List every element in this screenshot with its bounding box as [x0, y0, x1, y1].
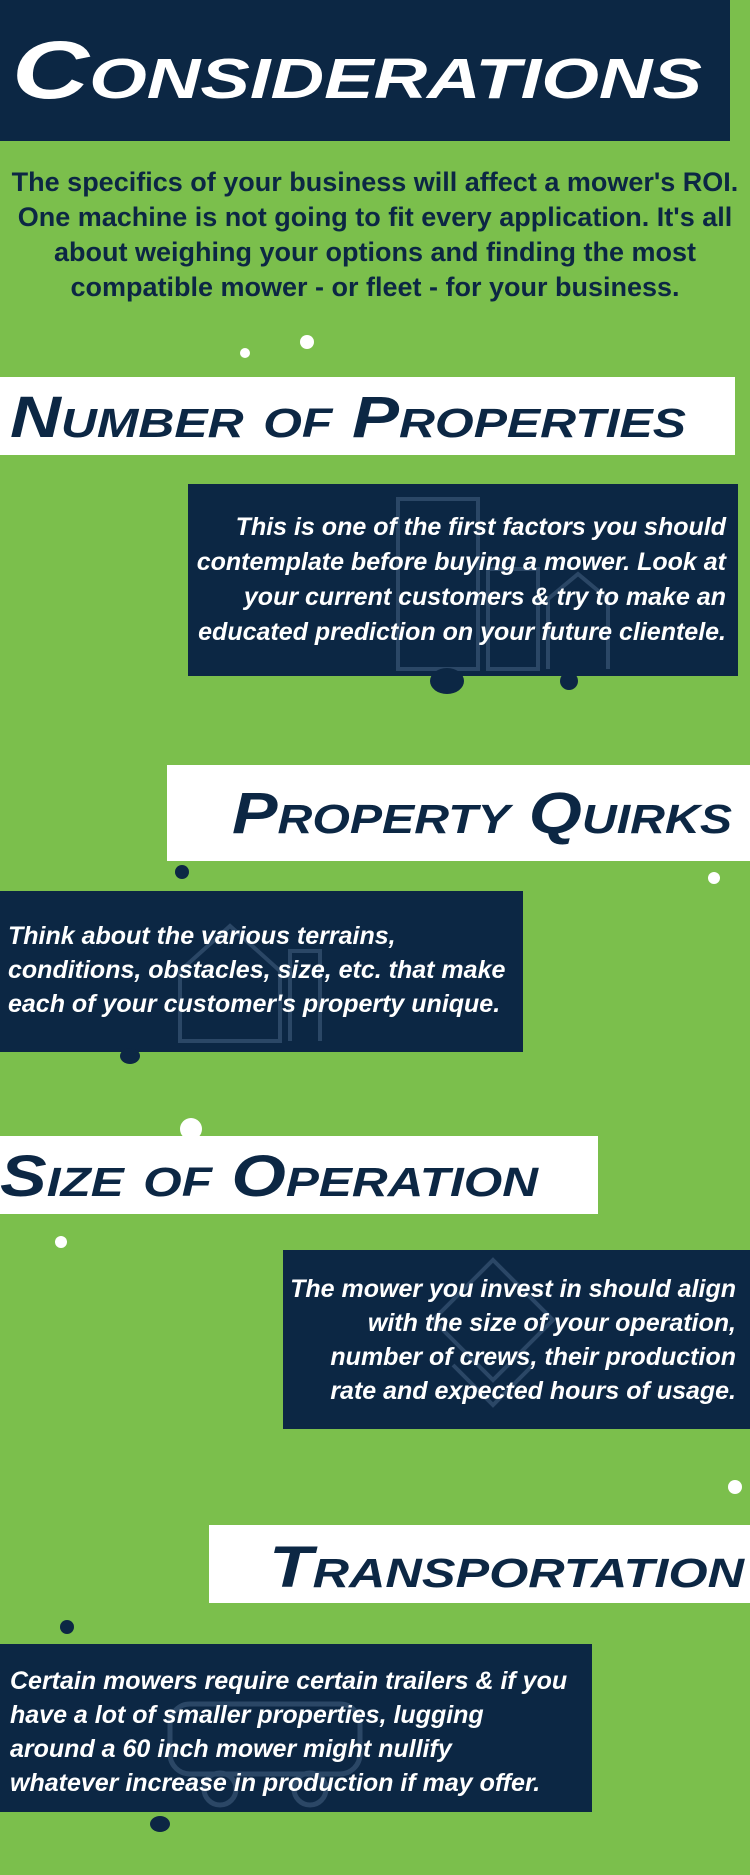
- text: number of crews, their production: [330, 1343, 736, 1371]
- text: whatever increase in production if may offer.: [10, 1769, 540, 1797]
- text: conditions, obstacles, size, etc. that make: [8, 956, 505, 984]
- intro text: about weighing your options and finding the most: [54, 237, 696, 267]
- title banner: [0, 0, 730, 141]
- icon: buildings: [396, 497, 610, 671]
- text: each of your customer's property unique.: [8, 990, 500, 1018]
- text: The mower you invest in should align: [290, 1275, 736, 1303]
- intro text: One machine is not going to fit every application. It's all: [18, 202, 732, 232]
- text: Certain mowers require certain trailers & if you: [10, 1667, 567, 1695]
- intro text: The specifics of your business will affect a mower's ROI.: [12, 167, 738, 197]
- text: contemplate before buying a mower. Look at: [197, 548, 726, 576]
- intro text: compatible mower - or fleet - for your business.: [70, 272, 680, 302]
- text: your current customers & try to make an: [244, 583, 726, 611]
- heading: transportation: [209, 1525, 750, 1603]
- text: [8, 922, 505, 1018]
- heading: number of properties: [0, 377, 735, 455]
- text: [10, 1667, 567, 1797]
- text: with the size of your operation,: [368, 1309, 736, 1337]
- heading: property quirks: [167, 765, 750, 861]
- panel: transportation: [0, 1644, 592, 1812]
- text: rate and expected hours of usage.: [330, 1377, 736, 1405]
- text: [197, 513, 727, 646]
- icon: diamonds: [431, 1257, 556, 1408]
- text: This is one of the first factors you should: [236, 513, 726, 541]
- heading: size of operation: Size of Operation: [0, 1144, 540, 1209]
- heading: property quirks: Property Quirks: [232, 781, 732, 846]
- panel: number of properties: [188, 484, 738, 676]
- icon: house: [178, 924, 322, 1043]
- panel: property quirks: [0, 891, 523, 1052]
- text: Think about the various terrains,: [8, 922, 396, 950]
- intro text: [12, 167, 738, 302]
- text: have a lot of smaller properties, lugging: [10, 1701, 484, 1729]
- heading: number of properties: Number of Properties: [10, 385, 686, 450]
- panel: size of operation: [283, 1250, 750, 1429]
- text: [290, 1275, 736, 1405]
- heading: size of operation: [0, 1136, 598, 1214]
- text: around a 60 inch mower might nullify: [10, 1735, 452, 1763]
- title banner: Considerations: [12, 25, 702, 116]
- heading: transportation: Transportation: [269, 1535, 746, 1600]
- icon: trailer: [168, 1702, 362, 1808]
- text: educated prediction on your future clientele.: [198, 618, 726, 646]
